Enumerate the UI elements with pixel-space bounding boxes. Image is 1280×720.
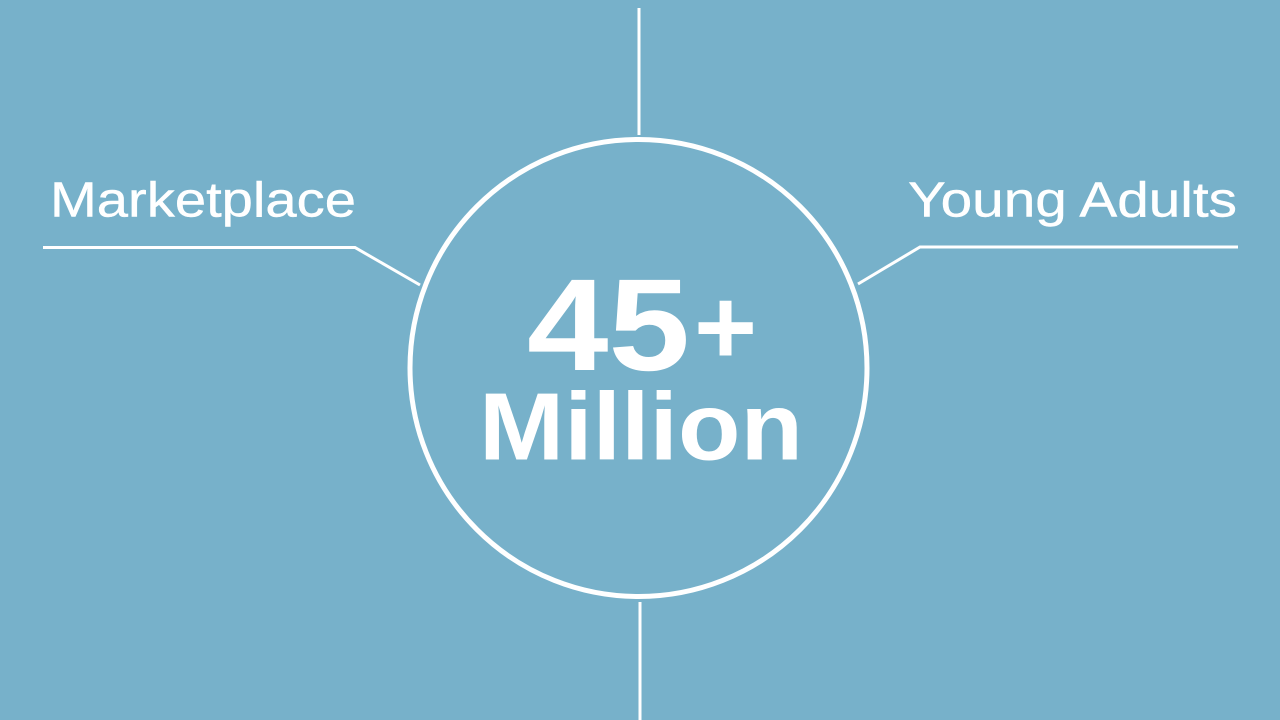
right connector line bbox=[858, 247, 1238, 284]
headline number: 45+: 45 bbox=[527, 251, 690, 398]
headline number: 45+ bbox=[527, 251, 757, 398]
left connector line bbox=[43, 248, 420, 285]
bottom connector line bbox=[638, 602, 642, 720]
central circle bbox=[410, 140, 867, 596]
label: Young Adults: Young Adults bbox=[908, 174, 1237, 228]
top connector line bbox=[638, 8, 640, 135]
headline unit: Million: Million bbox=[479, 374, 803, 480]
headline number: 45+: + bbox=[694, 266, 757, 387]
label: Marketplace: Marketplace bbox=[50, 174, 356, 228]
